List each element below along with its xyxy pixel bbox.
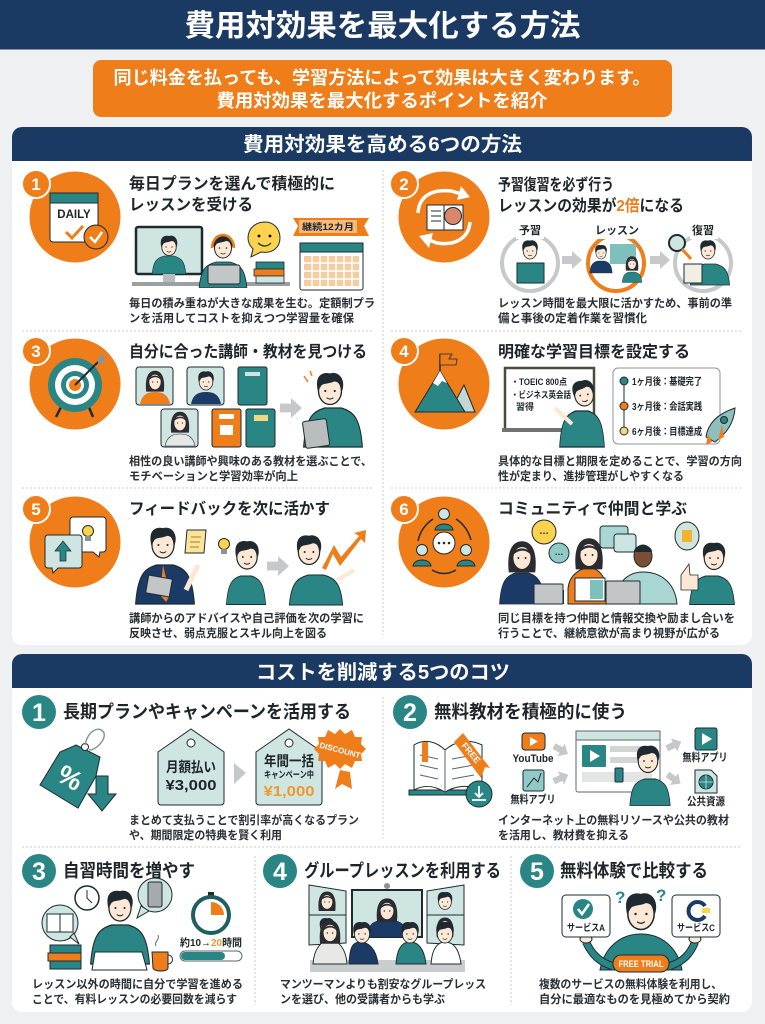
description xyxy=(129,296,375,325)
illustration: free book and online sources xyxy=(409,728,728,808)
heading xyxy=(498,175,684,215)
illustration: whiteboard, teacher and timeline: ・ビジネス英会話 xyxy=(511,389,571,400)
description: 備と事後の定着作業を習慣化 xyxy=(498,311,647,325)
illustration: whiteboard, teacher and timeline xyxy=(502,368,735,447)
panel: five cost tips xyxy=(12,654,752,1012)
icon: daily calendar: DAILY xyxy=(57,209,91,221)
illustration: community group: … xyxy=(554,547,564,557)
description: ンを活用してコストを抑えつつ学習量を確保 xyxy=(129,311,354,325)
number badge xyxy=(22,854,56,888)
heading: 自分に合った講師・教材を見つける xyxy=(129,342,367,361)
illustration: teachers, books and student xyxy=(136,367,362,449)
illustration: whiteboard, teacher and timeline: 習得 xyxy=(516,401,534,412)
icon: daily calendar xyxy=(22,170,120,262)
illustration: free book and online sources: FREE xyxy=(459,741,483,765)
number badge: 3 xyxy=(32,858,46,886)
illustration: comparing services xyxy=(562,886,720,972)
number badge: 2 xyxy=(403,699,417,727)
method 2: preview and review xyxy=(390,170,732,325)
description xyxy=(498,813,729,842)
heading: 長期プランやキャンペーンを活用する xyxy=(63,702,351,722)
description: ことで、有料レッスンの必要回数を減らす xyxy=(32,992,237,1006)
illustration: price tags and discount: ¥3,000 xyxy=(166,777,216,794)
tip 2: free materials xyxy=(393,695,729,842)
illustration: preview, lesson, review cycle xyxy=(502,222,731,291)
description: や、期間限定の特典を賢く利用 xyxy=(129,828,282,842)
illustration: comparing services: サービスC xyxy=(677,922,715,934)
method 4: clear goals xyxy=(390,337,742,483)
number badge xyxy=(520,854,554,888)
heading: レッスンの効果が2倍になる xyxy=(498,196,684,215)
heading: グループレッスンを利用する xyxy=(304,860,501,881)
illustration: free book and online sources: YouTube xyxy=(512,753,554,765)
title banner: 費用対効果を最大化する方法 xyxy=(184,10,580,43)
description: 自分に最適なものを見極めてから契約 xyxy=(539,992,730,1006)
illustration: preview, lesson, review cycle: レッスン xyxy=(595,225,639,237)
heading: 無料体験で比較する xyxy=(560,861,708,881)
illustration: preview, lesson, review cycle: 予習 xyxy=(519,224,541,237)
illustration: teacher feedback to growth xyxy=(136,528,366,605)
icon: mountain with flag: 4 xyxy=(399,342,409,361)
heading: フィードバックを次に活かす xyxy=(129,500,330,518)
method 6: community xyxy=(390,495,735,640)
illustration: whiteboard, teacher and timeline: 6ヶ月後：目標達成 xyxy=(632,425,702,438)
intro callout: 費用対効果を最大化するポイントを紹介 xyxy=(216,90,548,111)
heading: レッスンを受ける xyxy=(129,195,253,214)
icon: mountain with flag xyxy=(390,337,490,430)
description: 反映させ、弱点克服とスキル向上を図る xyxy=(129,626,327,640)
description xyxy=(129,454,372,483)
number badge xyxy=(263,854,297,888)
icon: feedback speech bubbles: 5 xyxy=(31,500,41,519)
description: 具体的な目標と期限を定めることで、学習の方向 xyxy=(498,454,742,468)
heading: 自習時間を増やす xyxy=(63,861,195,881)
illustration: comparing services: サービスA xyxy=(567,922,605,934)
icon: people cycle: 6 xyxy=(399,500,409,519)
icon: target: 3 xyxy=(31,342,41,361)
description: 相性の良い講師や興味のある教材を選ぶことで、 xyxy=(129,454,372,468)
intro callout: 同じ料金を払っても、学習方法によって効果は大きく変わります。 xyxy=(114,67,650,88)
number badge xyxy=(393,695,427,729)
heading: コミュニティで仲間と学ぶ xyxy=(498,499,687,518)
illustration: community group xyxy=(500,520,734,604)
description: インターネット上の無料リソースや公共の教材 xyxy=(498,813,729,827)
illustration: whiteboard, teacher and timeline: 1ヶ月後：基礎完了 xyxy=(632,375,702,388)
number badge xyxy=(22,695,56,729)
panel: six methods xyxy=(12,127,752,645)
illustration: price tags and discount xyxy=(40,729,366,811)
description: レッスン以外の時間に自分で学習を進める xyxy=(32,977,243,991)
illustration: community group: … xyxy=(539,526,549,537)
illustration: comparing services: ? xyxy=(615,888,625,907)
icon: feedback speech bubbles xyxy=(22,495,120,588)
illustration: student studying with stopwatch xyxy=(42,878,242,971)
description: まとめて支払うことで割引率が高くなるプラン xyxy=(129,813,359,827)
illustration: whiteboard, teacher and timeline: ・TOEIC 800点 xyxy=(511,376,567,387)
description: 複数のサービスの無料体験を利用し、 xyxy=(539,977,722,991)
description xyxy=(129,813,359,842)
illustration: free book and online sources: 公共資源 xyxy=(687,794,725,808)
description xyxy=(280,977,486,1006)
illustration: free book and online sources: 無料アプリ xyxy=(510,792,556,806)
icon: daily calendar: 1 xyxy=(31,175,41,194)
tip 4: group lessons xyxy=(263,854,501,1006)
illustration: price tags and discount: DISCOUNT xyxy=(318,741,361,760)
method 1: daily plan xyxy=(22,170,375,325)
icon: target xyxy=(22,337,120,430)
illustration: free book and online sources: 無料アプリ xyxy=(682,750,728,764)
number badge: 1 xyxy=(32,699,46,727)
icon: people cycle xyxy=(390,495,490,588)
description xyxy=(129,611,364,640)
illustration: online lesson and calendar xyxy=(132,218,369,290)
number badge: 4 xyxy=(273,858,287,886)
illustration: price tags and discount: % xyxy=(52,759,88,797)
description xyxy=(498,454,742,483)
method 5: feedback xyxy=(22,495,366,640)
heading: 明確な学習目標を設定する xyxy=(498,342,690,361)
description: モチベーションと学習効率が向上 xyxy=(129,469,298,483)
illustration: student studying with stopwatch: 約10→20時間 xyxy=(180,936,242,949)
illustration: price tags and discount: 年間一括 xyxy=(264,753,314,769)
description: ンを選び、他の受講者からも学ぶ xyxy=(280,992,445,1006)
panel: five cost tips: コストを削減する5つのコツ xyxy=(256,660,510,684)
heading xyxy=(129,174,335,214)
tip 3: more self-study xyxy=(22,854,243,1006)
icon: book in cycle arrows xyxy=(390,170,490,262)
illustration: whiteboard, teacher and timeline: 3ヶ月後：会話実践 xyxy=(632,400,702,413)
illustration: price tags and discount: 月額払い xyxy=(166,759,216,775)
panel: six methods: 費用対効果を高める6つの方法 xyxy=(243,133,522,156)
heading: 予習復習を必ず行う xyxy=(498,175,614,194)
illustration: price tags and discount: キャンペーン中 xyxy=(264,769,314,781)
heading: 無料教材を積極的に使う xyxy=(434,702,627,722)
illustration: online group classroom xyxy=(309,883,465,972)
illustration: comparing services: FREE TRIAL xyxy=(618,959,664,970)
description xyxy=(32,977,243,1006)
tip 1: long-term plans xyxy=(22,695,366,842)
description xyxy=(498,296,732,325)
description: レッスン時間を最大限に活かすため、事前の準 xyxy=(498,296,732,310)
description: を活用し、教材費を抑える xyxy=(498,828,629,842)
description: マンツーマンよりも割安なグループレッス xyxy=(280,977,486,991)
illustration: comparing services: ? xyxy=(656,886,666,905)
heading: 毎日プランを選んで積極的に xyxy=(129,174,335,193)
description: 性が定まり、進捗管理がしやすくなる xyxy=(498,469,684,483)
number badge: 5 xyxy=(530,858,544,886)
description xyxy=(539,977,730,1006)
description xyxy=(498,611,735,640)
illustration: online lesson and calendar: 継続12カ月 xyxy=(302,221,354,232)
description: 行うことで、継続意欲が高まり視野が広がる xyxy=(498,626,720,640)
description: 毎日の積み重ねが大きな成果を生む。定額制プラ xyxy=(129,296,375,310)
method 3: find teacher and materials xyxy=(22,337,372,483)
icon: book in cycle arrows: 2 xyxy=(399,175,409,194)
tip 5: free trials xyxy=(520,854,730,1006)
description: 講師からのアドバイスや自己評価を次の学習に xyxy=(129,611,364,625)
intro callout xyxy=(93,60,672,117)
title banner xyxy=(0,0,765,50)
illustration: preview, lesson, review cycle: 復習 xyxy=(692,223,714,237)
illustration: price tags and discount: ¥1,000 xyxy=(264,783,314,800)
description: 同じ目標を持つ仲間と情報交換や励まし合いを xyxy=(498,611,735,625)
